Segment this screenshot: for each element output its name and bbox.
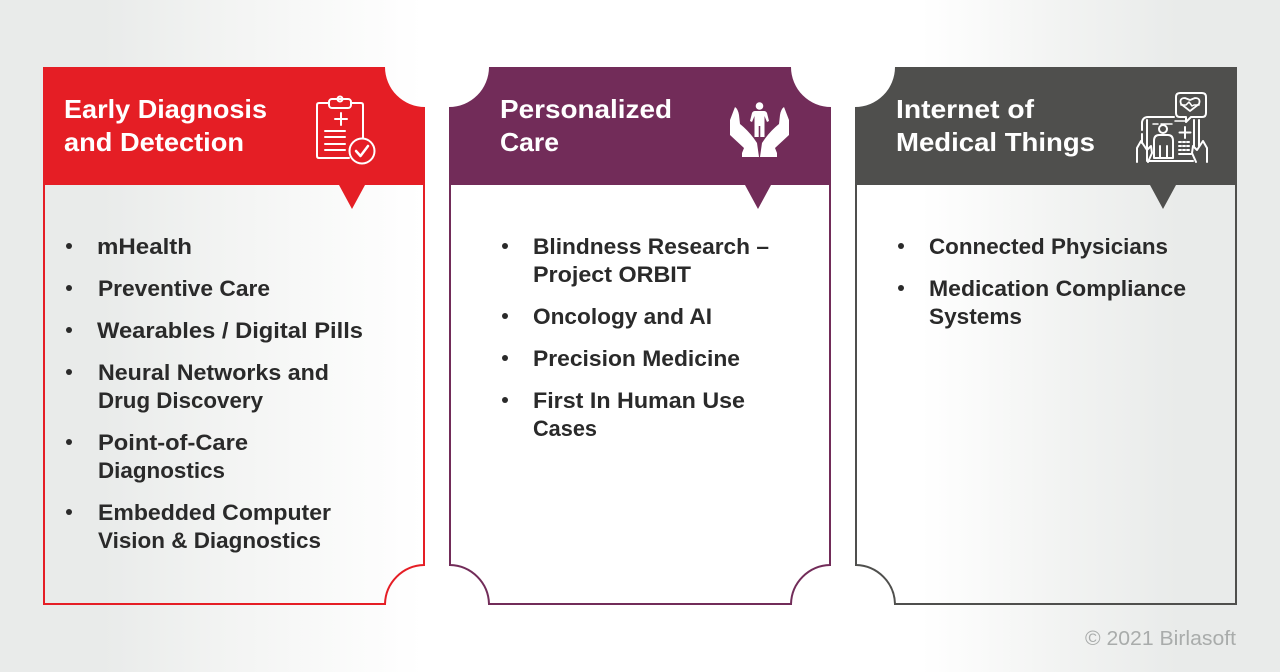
bullet list: Oncology and AI — [533, 304, 712, 329]
panel outline — [856, 185, 1236, 604]
bullet list: Project ORBIT — [533, 262, 692, 287]
bullet list — [66, 234, 363, 553]
bullet list: Systems — [929, 304, 1022, 329]
bullet list: Cases — [533, 416, 597, 441]
header band — [43, 67, 425, 209]
icon: tablet with patient and heart bubble — [1137, 93, 1207, 162]
icon: hands holding person — [730, 102, 789, 157]
panel: early diagnosis and detection — [43, 67, 425, 604]
panel: personalized care — [449, 67, 831, 604]
bullet list: Connected Physicians — [929, 234, 1168, 259]
heading: Personalized — [500, 94, 672, 124]
bullet list: Wearables / Digital Pills — [97, 318, 363, 343]
bullet list: Medication Compliance — [929, 276, 1186, 301]
bullet list: Drug Discovery — [98, 388, 264, 413]
copyright: © 2021 Birlasoft — [1085, 628, 1236, 650]
bullet list: Embedded Computer — [98, 500, 331, 525]
bullet list: Preventive Care — [98, 276, 270, 301]
bullet list: Blindness Research – — [533, 234, 769, 259]
heading: Care — [500, 127, 559, 157]
bullet list: Vision & Diagnostics — [98, 528, 321, 553]
panel: internet of medical things — [855, 67, 1237, 604]
heading: Internet of — [896, 94, 1034, 124]
bullet list: Diagnostics — [98, 458, 225, 483]
bullet list: Point-of-Care — [98, 430, 248, 455]
bullet list: Neural Networks and — [98, 360, 329, 385]
bullet list — [898, 234, 1186, 329]
panel outline — [450, 185, 830, 604]
bullet list: mHealth — [97, 234, 192, 259]
header band — [449, 67, 831, 209]
heading: and Detection — [64, 127, 244, 157]
heading: Medical Things — [896, 127, 1095, 157]
heading: Early Diagnosis — [64, 94, 267, 124]
bullet list: First In Human Use — [533, 388, 745, 413]
header band — [855, 67, 1237, 209]
panel outline — [44, 185, 424, 604]
bullet list: Precision Medicine — [533, 346, 740, 371]
bullet list — [502, 234, 769, 441]
icon: clipboard with check — [317, 96, 374, 164]
